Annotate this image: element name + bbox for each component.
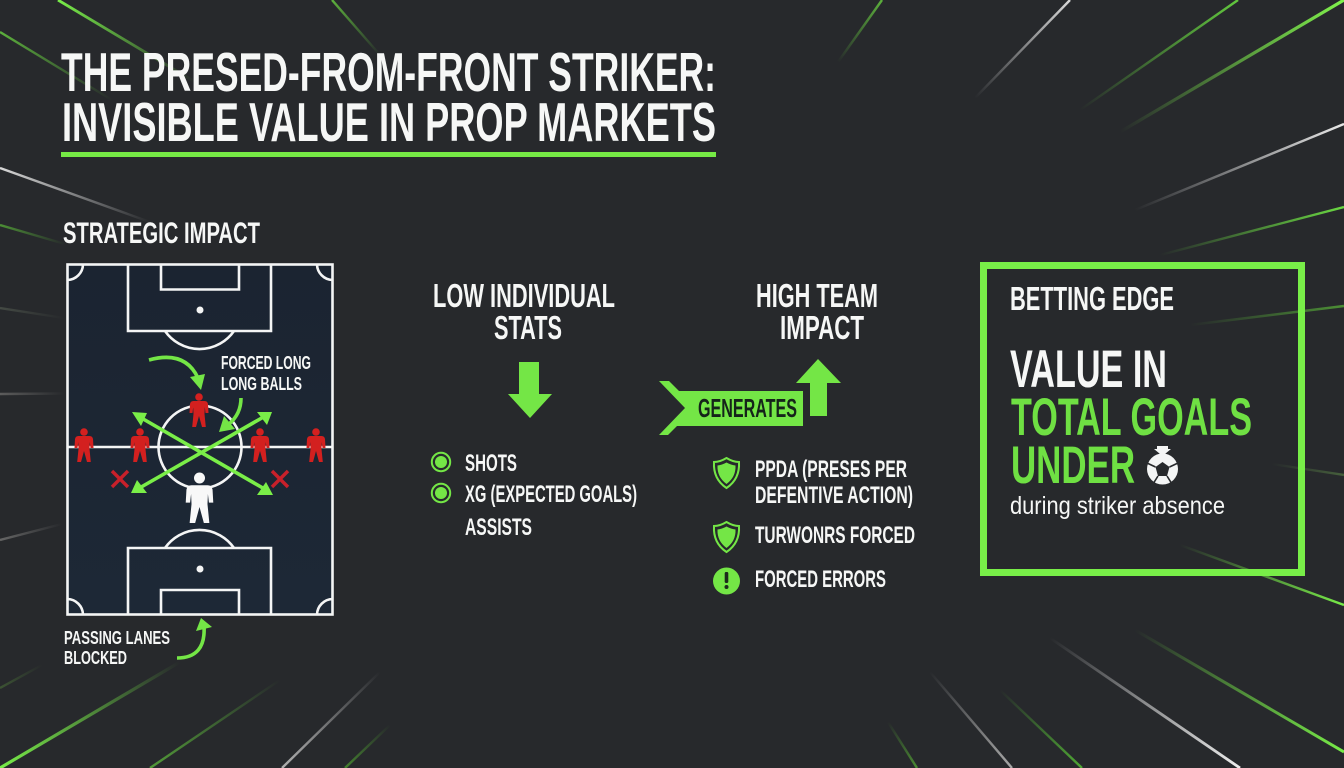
title: INVISIBLE VALUE IN PROP MARKETS xyxy=(62,91,716,153)
white striker xyxy=(186,472,213,523)
heading: strategic impact: STRATEGIC IMPACT xyxy=(63,217,260,250)
panel: pitch diagram xyxy=(67,264,333,614)
panel: betting edge xyxy=(984,266,1302,572)
arrow: up xyxy=(796,359,841,416)
heading: betting edge: BETTING EDGE xyxy=(1010,280,1174,317)
arrow: down xyxy=(508,362,552,418)
callout: forced long balls: FORCED LONG xyxy=(221,353,311,373)
text: turnovers forced: TURWONRS FORCED xyxy=(755,522,915,549)
passing lane arrows xyxy=(131,412,273,495)
text: forced errors: FORCED ERRORS xyxy=(755,566,886,593)
callout: forced long balls xyxy=(221,353,311,394)
heading: high team impact xyxy=(756,277,878,346)
heading: low individual stats xyxy=(433,277,615,346)
icon: football with down arrow xyxy=(1147,446,1178,484)
red crosses xyxy=(112,471,288,487)
icon: shots xyxy=(432,453,450,471)
title: THE PRESED-FROM-FRONT STRIKER: xyxy=(61,41,716,103)
icon: exclamation xyxy=(713,568,740,594)
arrow banner: generates xyxy=(659,381,803,435)
heading: high team impact: IMPACT xyxy=(780,309,864,346)
value statement xyxy=(1010,340,1252,495)
curved arrow: long balls xyxy=(219,398,241,432)
callout: forced long balls: LONG BALLS xyxy=(221,374,302,394)
curved arrow: press on top player xyxy=(149,357,205,390)
red opponents xyxy=(74,393,326,462)
text: ppda: DEFENTIVE ACTION) xyxy=(755,482,913,509)
text: shots: SHOTS xyxy=(465,450,517,477)
value statement: VALUE IN xyxy=(1010,340,1167,399)
penalty spots xyxy=(196,306,204,572)
list: high team impact xyxy=(713,456,915,594)
icon: xg xyxy=(432,484,450,502)
list: low individual stats xyxy=(432,450,637,541)
heading: high team impact: HIGH TEAM xyxy=(756,277,878,314)
callout: passing lanes blocked: PASSING LANES xyxy=(64,628,170,648)
value statement: UNDER xyxy=(1011,436,1135,495)
heading: low individual stats: LOW INDIVIDUAL xyxy=(433,277,615,314)
icon: shield ppda xyxy=(714,458,739,488)
subtext: during striker absence: during striker absence xyxy=(1010,492,1225,520)
text: ppda xyxy=(755,456,913,509)
heading: low individual stats: STATS xyxy=(494,309,562,346)
callout: passing lanes blocked xyxy=(64,618,212,668)
text: ppda: PPDA (PRESES PER xyxy=(755,456,907,483)
text: xg: XG (EXPECTED GOALS) xyxy=(465,481,637,508)
title xyxy=(61,41,716,157)
arrow banner: generates: GENERATES xyxy=(698,393,797,423)
text: assists: ASSISTS xyxy=(465,514,532,541)
callout: passing lanes blocked: BLOCKED xyxy=(64,648,127,668)
icon: shield turnovers xyxy=(714,522,739,552)
pitch markings xyxy=(67,264,333,614)
